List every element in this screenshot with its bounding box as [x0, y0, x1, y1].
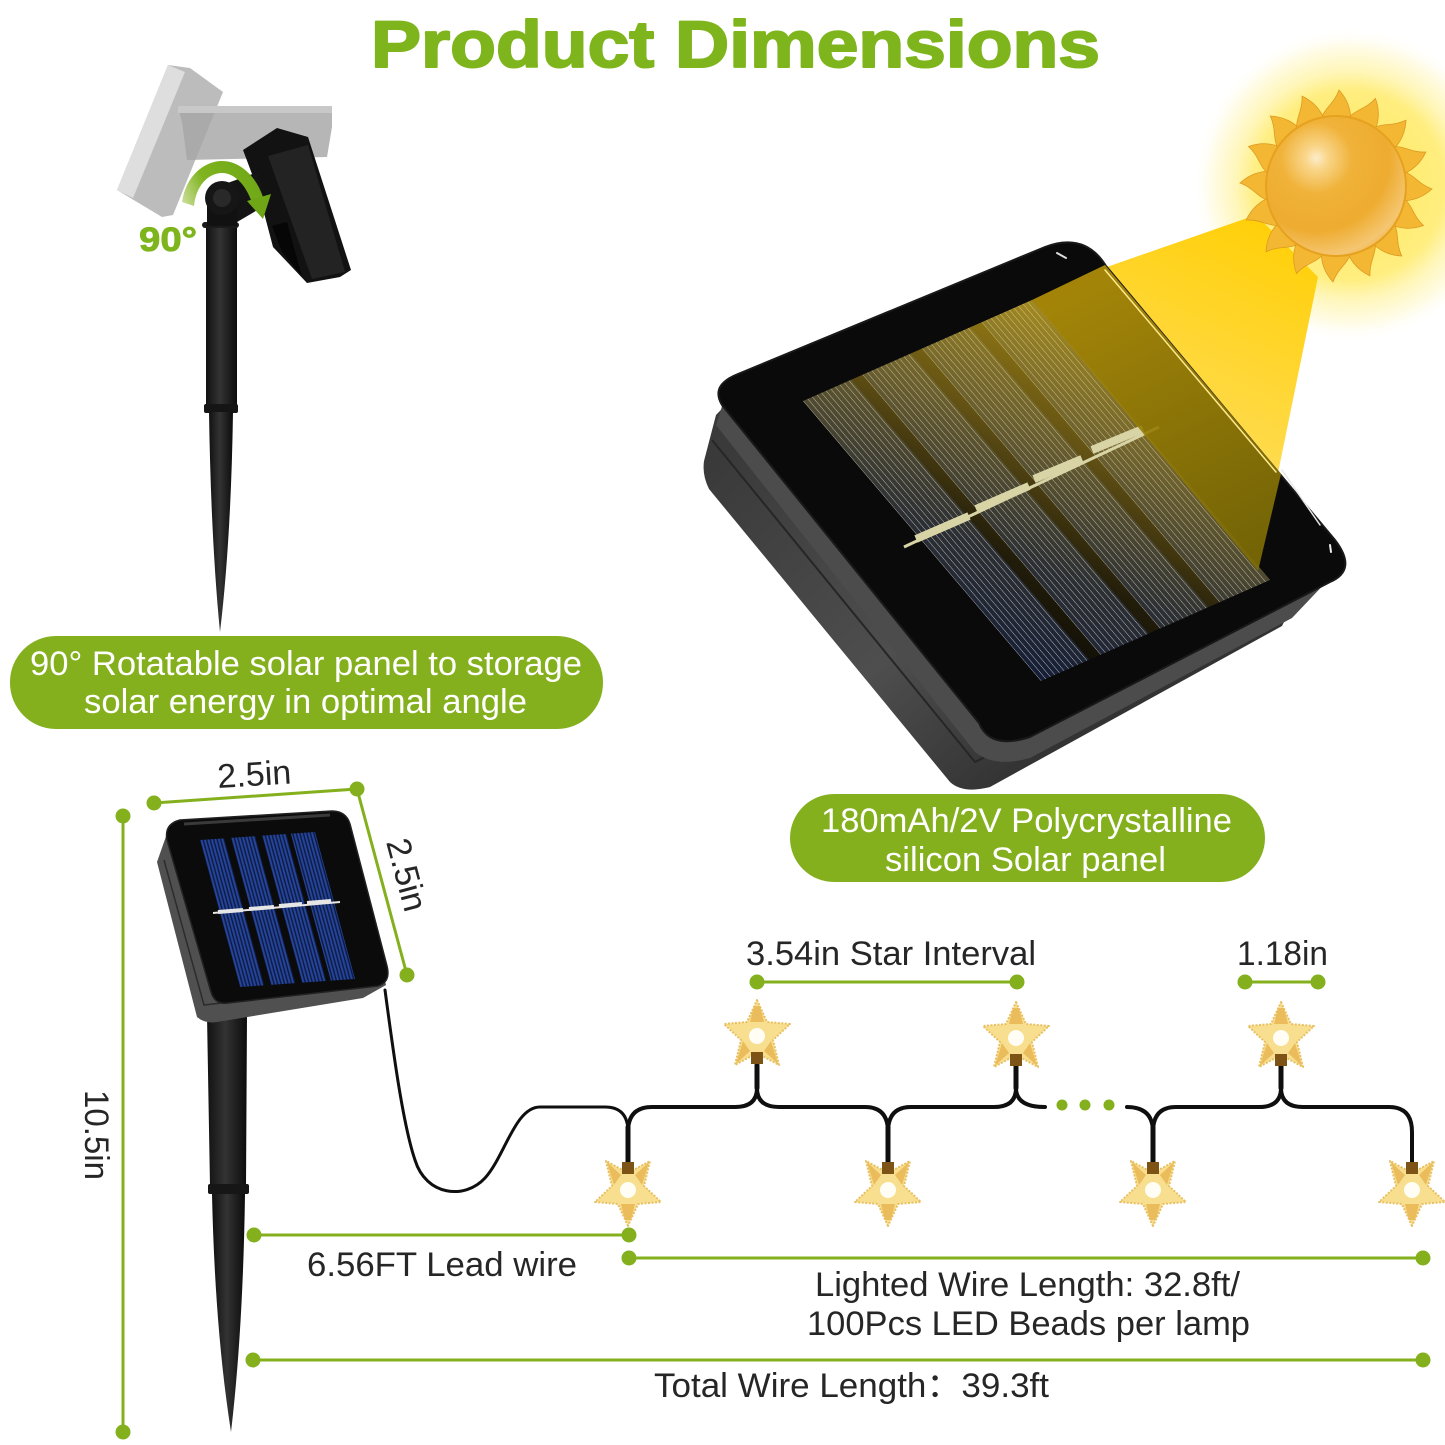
total wire label: Total Wire Length：39.3ft — [654, 1367, 1050, 1405]
panel depth label: 2.5in — [378, 834, 434, 916]
stake collar — [208, 1184, 249, 1194]
rotatable panel caption pill: solar energy in optimal angle — [84, 683, 527, 721]
ghost panel tilted left — [117, 65, 223, 217]
solar panel caption pill — [790, 794, 1265, 882]
star lights — [595, 1000, 1445, 1226]
stake collars — [202, 222, 239, 413]
star interval label: 3.54in Star Interval — [746, 935, 1036, 973]
stake shaft — [207, 1015, 247, 1186]
sun — [1240, 90, 1432, 282]
string light wires — [385, 990, 1412, 1192]
rotatable panel caption pill: 90° Rotatable solar panel to storage — [30, 645, 582, 683]
90 degree label: 90° — [139, 221, 197, 259]
stake spike — [209, 412, 233, 632]
lid highlight edges — [1057, 253, 1331, 552]
led beads label: 100Pcs LED Beads per lamp — [807, 1305, 1250, 1343]
lead wire label: 6.56FT Lead wire — [307, 1246, 577, 1284]
solar panel caption pill: silicon Solar panel — [885, 841, 1166, 879]
panel lid — [718, 242, 1345, 741]
solar cells — [803, 300, 1270, 681]
small solar stake product — [157, 811, 388, 1432]
ellipsis dots — [1056, 1100, 1114, 1110]
dimension lines — [117, 783, 1429, 1438]
stake shaft — [206, 226, 237, 406]
solar panel caption pill: 180mAh/2V Polycrystalline — [821, 802, 1232, 840]
dimension labels — [77, 754, 1328, 1405]
sun rays — [1240, 90, 1432, 282]
green rotation arrow — [182, 161, 271, 219]
rotating solar stake illustration — [117, 65, 351, 632]
height label: 10.5in — [77, 1090, 115, 1180]
panel width label: 2.5in — [216, 754, 292, 796]
pivot joint — [205, 172, 266, 226]
stake spike — [212, 1194, 245, 1432]
black panel — [243, 128, 351, 283]
silver bus bar — [213, 901, 340, 913]
beam overlay on lid — [1032, 265, 1281, 571]
panel base — [157, 825, 386, 1022]
bead interval label: 1.18in — [1237, 935, 1328, 973]
lighted wire label: Lighted Wire Length: 32.8ft/ — [815, 1266, 1241, 1304]
rotatable panel caption pill — [10, 636, 603, 729]
panel lid — [167, 811, 388, 1003]
panel base — [704, 390, 1300, 790]
sun glow — [1190, 25, 1445, 345]
lid top highlight — [184, 815, 330, 824]
silver bus bar — [904, 427, 1159, 547]
panel lid rim — [716, 400, 1330, 762]
solar cells — [200, 832, 355, 987]
light beam — [1104, 215, 1318, 571]
ghost panel horizontal — [178, 106, 332, 160]
sun disc — [1266, 116, 1406, 256]
title: Product Dimensions — [371, 7, 1100, 81]
sunlight on large solar panel illustration — [704, 25, 1445, 790]
